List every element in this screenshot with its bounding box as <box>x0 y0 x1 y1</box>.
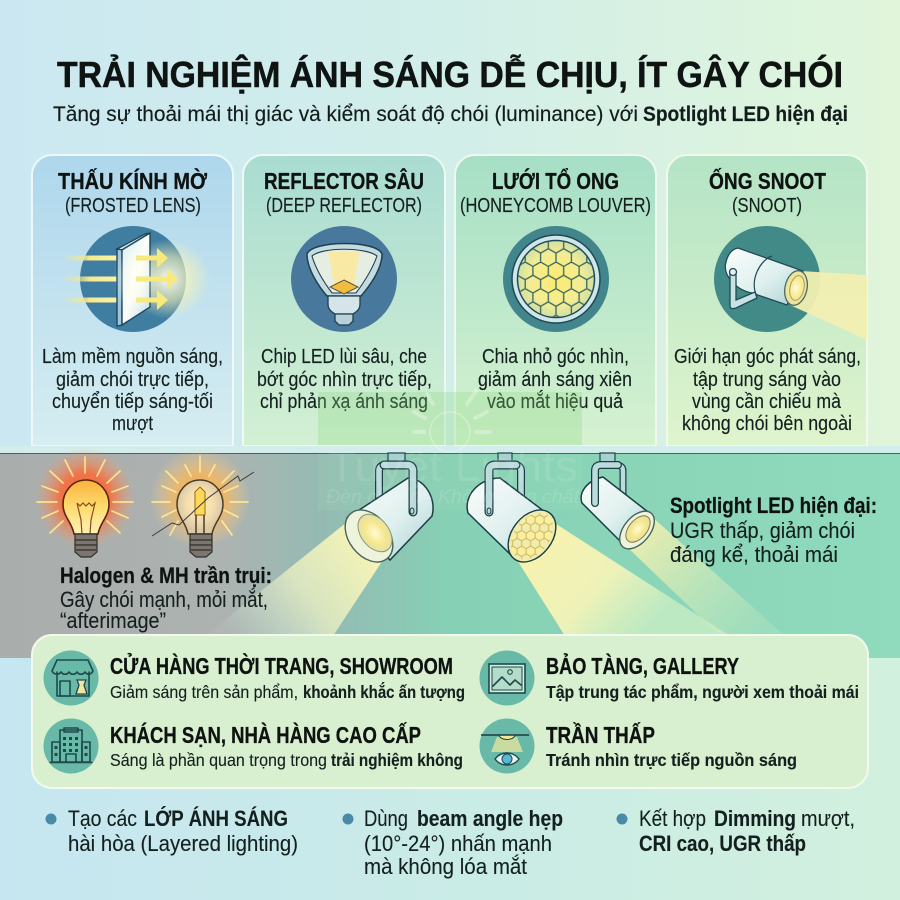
description: frosted lens: mượt <box>112 412 153 435</box>
application: low ceiling: TRẦN THẤP <box>546 721 655 748</box>
note: layered lighting: Tạo các <box>68 806 137 831</box>
icon: framed picture <box>480 650 534 706</box>
application: hotel and restaurant: KHÁCH SẠN, NHÀ HÀNG CAO CẤP <box>110 721 421 748</box>
note: layered lighting: LỚP ÁNH SÁNG <box>144 806 288 831</box>
heading: snoot <box>709 167 826 217</box>
note: layered lighting: hài hòa (Layered lighting) <box>68 831 298 856</box>
description: snoot: tập trung sáng vào <box>693 368 841 391</box>
application: hotel and restaurant: Sáng là phần quan trọng trong <box>110 750 327 770</box>
icon: middle honeycomb spotlight <box>467 453 566 571</box>
description: snoot: vùng cần chiếu mà <box>692 390 842 413</box>
description: deep reflector: bớt góc nhìn trực tiếp, <box>257 368 432 391</box>
application: hotel and restaurant: trải nghiệm không <box>331 750 463 770</box>
description: deep reflector <box>257 345 432 413</box>
text: modern LED spotlight: đáng kể, thoải mái <box>670 542 838 567</box>
title: TRẢI NGHIỆM ÁNH SÁNG DỄ CHỊU, ÍT GÂY CHÓI <box>57 53 843 95</box>
application: museum and gallery <box>480 650 859 706</box>
note: dimming and CRI: mượt, <box>801 806 855 831</box>
icon: storefront <box>44 650 98 706</box>
note: layered lighting <box>46 806 298 856</box>
application: low ceiling: Tránh nhìn trực tiếp nguồn sáng <box>546 750 797 770</box>
text: modern LED spotlight <box>670 493 877 567</box>
application: fashion store: khoảnh khắc ấn tượng <box>303 681 465 702</box>
description: deep reflector: Chip LED lùi sâu, che <box>261 345 427 368</box>
note: dimming and CRI <box>616 806 855 856</box>
watermark logo: Tuyệt Lights <box>328 442 578 491</box>
text: halogen and metal halide: “afterimage” <box>60 608 166 633</box>
application: hotel and restaurant <box>44 718 463 774</box>
heading: snoot: ỐNG SNOOT <box>709 167 826 194</box>
description: frosted lens <box>42 345 223 435</box>
icon: deep reflector <box>291 226 397 332</box>
heading: deep reflector <box>264 167 424 217</box>
panel: honeycomb louver <box>455 155 656 446</box>
note: narrow beam angle: (10°-24°) nhấn mạnh <box>364 831 552 856</box>
heading: honeycomb louver: (HONEYCOMB LOUVER) <box>460 194 651 217</box>
note: narrow beam angle: beam angle hẹp <box>417 806 563 831</box>
heading: frosted lens: THẤU KÍNH MỜ <box>58 167 207 194</box>
comparison band <box>0 445 900 658</box>
description: honeycomb louver: vào mắt hiệu quả <box>487 390 624 413</box>
icon: frosted lens <box>62 226 210 332</box>
description: snoot <box>674 345 861 435</box>
description: snoot: không chói bên ngoài <box>682 412 852 435</box>
icon: snoot <box>714 226 867 340</box>
note: dimming and CRI: Kết hợp <box>639 806 706 831</box>
panel: applications <box>32 635 868 788</box>
light beam: left spotlight <box>205 522 383 636</box>
note: narrow beam angle: mà không lóa mắt <box>364 854 527 879</box>
application: museum and gallery: Tập trung tác phẩm, người xem thoải mái <box>546 682 859 702</box>
description: honeycomb louver <box>478 345 632 413</box>
application: museum and gallery: BẢO TÀNG, GALLERY <box>546 651 739 679</box>
note: narrow beam angle <box>342 806 563 879</box>
light beam: middle spotlight <box>517 522 730 636</box>
icon: ceiling light and eye <box>480 718 534 774</box>
description: frosted lens: Làm mềm nguồn sáng, <box>42 345 223 368</box>
text: halogen and metal halide: Halogen & MH trần trụi: <box>60 563 272 588</box>
icon: bare metal halide bulb <box>150 448 254 557</box>
description: snoot: Giới hạn góc phát sáng, <box>674 345 861 368</box>
description: frosted lens: chuyển tiếp sáng-tối <box>52 390 213 413</box>
application: low ceiling <box>480 718 797 774</box>
heading: deep reflector: (DEEP REFLECTOR) <box>266 194 422 217</box>
note: narrow beam angle: Dùng <box>364 806 408 831</box>
heading: deep reflector: REFLECTOR SÂU <box>264 167 424 194</box>
icon: left track spotlight <box>335 453 433 571</box>
watermark logo <box>326 391 580 508</box>
text: halogen and metal halide <box>60 563 272 633</box>
watermark logo: Đèn chuẩn - Không gian chất <box>326 487 580 508</box>
watermark panel <box>318 392 582 510</box>
note: dimming and CRI: Dimming <box>714 806 796 831</box>
light beam: right spotlight <box>625 515 785 636</box>
icon: hotel building <box>44 718 98 774</box>
note: dimming and CRI: CRI cao, UGR thấp <box>639 831 806 856</box>
application: fashion store <box>44 650 465 706</box>
heading: honeycomb louver <box>460 167 651 217</box>
description: honeycomb louver: Chia nhỏ góc nhìn, <box>482 345 629 368</box>
heading: snoot: (SNOOT) <box>732 194 802 217</box>
subtitle: Tăng sự thoải mái thị giác và kiểm soát độ chói (luminance) với <box>53 103 638 126</box>
panel: snoot <box>667 155 867 446</box>
subtitle: Spotlight LED hiện đại <box>643 103 848 126</box>
heading: honeycomb louver: LƯỚI TỔ ONG <box>492 167 619 194</box>
application: fashion store: CỬA HÀNG THỜI TRANG, SHOWROOM <box>110 651 453 679</box>
icon: right snoot spotlight <box>581 453 661 555</box>
description: frosted lens: giảm chói trực tiếp, <box>56 368 209 391</box>
text: halogen and metal halide: Gây chói mạnh, mỏi mắt, <box>60 587 268 612</box>
text: modern LED spotlight: UGR thấp, giảm chói <box>670 518 855 543</box>
panel: frosted lens <box>32 155 233 446</box>
panel: deep reflector <box>243 155 445 446</box>
heading: frosted lens: (FROSTED LENS) <box>65 194 201 217</box>
description: deep reflector: chỉ phản xạ ánh sáng <box>260 390 428 413</box>
description: honeycomb louver: giảm ánh sáng xiên <box>478 368 632 391</box>
heading: frosted lens <box>58 167 207 217</box>
application: fashion store: Giảm sáng trên sản phẩm, <box>110 682 298 702</box>
icon: bare incandescent bulb <box>35 448 135 557</box>
icon: honeycomb louver <box>503 226 609 332</box>
